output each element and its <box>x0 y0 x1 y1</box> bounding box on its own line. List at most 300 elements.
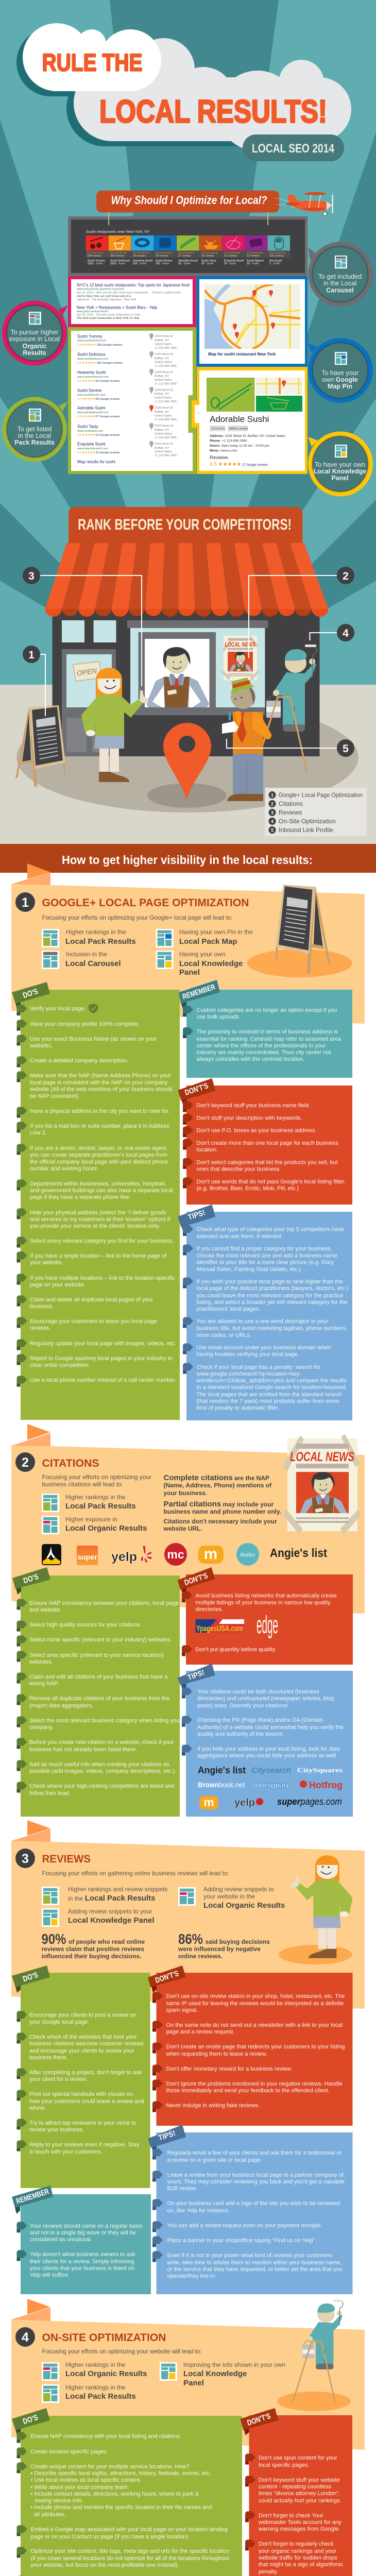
list: do's: and government buildings can also have a separate local <box>30 1188 173 1194</box>
panel: organic results: www.yelp.com/nyc/sushi <box>76 310 108 313</box>
list: don'ts: multiple listings of your business in various low quality <box>196 1600 331 1606</box>
list: don'ts: warning messages from Google. <box>258 2526 340 2532</box>
list: tips: Your citations could be both structured (business <box>197 1689 319 1695</box>
list: don'ts <box>182 1591 337 1656</box>
aggregator logos: Citysearch <box>251 1766 291 1775</box>
poster in window: LOCAL NEWS <box>225 641 255 648</box>
panel: local pack results: 209 Google reviews <box>97 344 123 347</box>
legend: 5 <box>271 827 274 833</box>
benefits: Panel <box>183 2379 204 2387</box>
list: do's: your website, but focus on the most profitable one instead). <box>31 2562 179 2568</box>
panel: organic results <box>68 276 196 327</box>
background: sky rays <box>0 0 376 690</box>
legend: 4 <box>271 819 274 824</box>
panel: don'ts section 2 <box>177 1567 353 1665</box>
list: do's: where. <box>29 2105 46 2111</box>
list: do's: towing service info. <box>35 2498 83 2504</box>
panel: local pack results: United States <box>155 379 172 382</box>
stat: 86 percent: were influenced by negative <box>178 1945 261 1953</box>
list: do's: Make sure that the NAP (Name Address Phone) on your <box>30 1073 171 1079</box>
tag: do's <box>12 1567 50 1595</box>
list: do's: (major) data aggregators. <box>29 1703 93 1709</box>
tag: don'ts: DON'T'S <box>184 1081 210 1097</box>
panel: local pack map: Map for sushi restaurant New York <box>208 352 276 357</box>
list: do's: After completing a project, don't forget to ask <box>29 2070 142 2076</box>
legend: 3 <box>271 810 274 815</box>
directory logos: super <box>77 1553 97 1561</box>
tag: don'ts <box>178 1078 215 1106</box>
list: do's: If you are a doctor, dentist, lawyer, or real estate agent <box>30 1145 166 1151</box>
section 3: reviews <box>11 1820 365 2009</box>
citation definitions: Citations don't necessary include your <box>164 1518 277 1525</box>
tag: do's: DO'S <box>22 987 39 1000</box>
section number 3 <box>15 1849 35 1868</box>
list: do's: Create a detailed company description. <box>30 1058 128 1064</box>
subtitle pill <box>243 134 344 161</box>
list: tips <box>182 1688 344 1759</box>
list: don'ts: ones that describe your business. <box>197 1166 281 1173</box>
shop sign: rank before your competitors <box>69 507 303 546</box>
list: tips: quality and authority of the source. <box>197 1731 284 1737</box>
list: tips: B2B review. <box>167 2185 197 2192</box>
tag: remember <box>179 980 220 1009</box>
list: do's: Reply to your reviews even if negative. Stay <box>29 2142 140 2148</box>
list: tips: Leave a review from your business local page to a partner company of <box>167 2172 344 2178</box>
panel: tips section 3 <box>148 2125 352 2294</box>
panel: local pack results: Buffalo, NY <box>155 339 169 342</box>
list: do's: Report to Google spammy local pages in your industry to <box>30 1355 173 1362</box>
list: tips: to a standard localized Google search for location+keyword. <box>197 1384 347 1391</box>
callout: local pack <box>2 397 68 462</box>
benefits: Inclusion in the <box>66 951 107 958</box>
benefits: Local Pack Map <box>179 937 237 946</box>
list: don'ts: Don't use on-site review station in your shop, hotel, restaurant, etc. The <box>166 1993 345 1999</box>
list: tips: operate/they live in. <box>167 2273 216 2279</box>
list: don'ts <box>245 2453 344 2575</box>
panel: local pack results: 19 Google reviews <box>96 434 120 437</box>
callout: local organic: exposure in Local <box>9 335 60 343</box>
legend: 2 <box>271 802 274 807</box>
list: tips: choose the most relevant one and add a business name <box>197 1252 337 1259</box>
list: remember: industry are mainly concentrated. Thus city center not <box>197 1049 331 1056</box>
benefits: Local Knowledge Panel <box>68 1916 155 1925</box>
panel: local pack results: 5.0 ★★★★★ <box>77 343 96 347</box>
list: don'ts: spam signal. <box>166 2007 198 2013</box>
list: remember: Yelp doesn't allow business owners to ask <box>30 2251 135 2258</box>
list: do's: Have your company profile 100% complete. <box>30 1021 140 1027</box>
panel: local pack results: 1234 Street St <box>155 335 173 338</box>
tag: do's <box>12 982 50 1009</box>
list: tips <box>152 2148 345 2279</box>
panel: organic results: The best sushi restaurants in New York on Yelp <box>77 317 139 320</box>
benefits: Higher rankings in the <box>65 2384 126 2391</box>
aggregator logos: Hotfrog <box>309 1780 343 1790</box>
poster in window <box>221 635 259 681</box>
list: do's: Check which of the websites that host your <box>29 2034 137 2040</box>
panel: local pack results: United States <box>155 414 172 417</box>
stat: 90 percent: reviews claim that positive reviews <box>41 1945 144 1953</box>
benefits: Local Knowledge <box>179 959 243 968</box>
number markers with leader lines: 1 <box>28 649 35 661</box>
list: don'ts: Don't forget to check Your <box>259 2513 323 2519</box>
panel: local carousel: 139 reviews <box>269 255 284 258</box>
callout: knowledge panel <box>308 432 373 497</box>
number markers with leader lines <box>23 567 354 757</box>
section 4: on-site optimization <box>11 2299 365 2450</box>
panel: local knowledge: Write a review <box>229 428 248 431</box>
list: don'ts: that might be a sign of algorithmic <box>259 2562 344 2568</box>
callout: local organic <box>2 301 68 366</box>
list: do's: Try to attract top reviewers in your niche to <box>29 2120 136 2126</box>
list: tips: directories) and unstructured (newspaper articles, blog <box>197 1696 334 1702</box>
callout: map pin <box>308 338 373 403</box>
list: remember: your clients that your business is listed on <box>30 2265 134 2272</box>
list: do's: Select the most relevant business category when listing your <box>29 1718 181 1724</box>
list: do's: you provide your service at the clients' location only. <box>30 1223 160 1229</box>
panel: local pack results: 4.0 ★★★★★ <box>77 451 96 454</box>
stat: 90 percent: influenced their buying decisions. <box>41 1953 142 1960</box>
aggregator logos: yelp <box>234 1797 255 1808</box>
panel: local pack results: 1234 Street St <box>155 406 173 410</box>
panel: local knowledge: Address: 1234 Street St, Buffalo, NY, United States <box>210 434 285 438</box>
list: do's: company. <box>29 1724 54 1731</box>
list: remember: and not in a single big wave or they will be <box>30 2230 136 2236</box>
list: tips: a review on a given site or local page. <box>167 2157 262 2163</box>
panel: remember section 1 <box>179 980 352 1078</box>
list: do's: your client for a review. <box>29 2076 88 2082</box>
panel: do's section 3 <box>12 1965 150 2188</box>
list: don'ts: when requesting them to leave a review. <box>166 2051 267 2057</box>
panel: local carousel: $$ - Sushi <box>224 262 236 265</box>
list: do's: the official company local page with your distinct phone <box>30 1159 168 1165</box>
panel: local knowledge: 4.5 ★★★★★ <box>210 462 242 467</box>
aggregator logos: CitySquares <box>297 1766 343 1774</box>
citation definitions: website URL. <box>163 1525 202 1532</box>
list: don'ts: Don't offer monetary reward for a business review. <box>166 2066 292 2072</box>
benefits: Local Pack Results <box>65 2392 136 2401</box>
callout: map pin: own Google <box>322 376 358 383</box>
list: don'ts: On the same note do not send out a newsletter with a link to your local <box>166 2022 343 2028</box>
list: do's <box>16 1599 181 1797</box>
list: tips: If you cannot find a proper category for your business, <box>197 1246 332 1252</box>
list: don'ts: could actually hurt your rankings. <box>259 2498 341 2504</box>
subtitle pill: LOCAL SEO 2014 <box>252 142 335 156</box>
panel: local carousel: $ - Sushi <box>269 262 280 265</box>
list: do's: page on your website. <box>30 1282 86 1288</box>
citation definitions: business name and phone number only. <box>164 1508 281 1515</box>
tag: remember: REMEMBER <box>181 982 216 1002</box>
list: remember: their clients for a review. Simply informing <box>30 2259 134 2265</box>
list: tips: practitioners' local pages. <box>197 1306 260 1312</box>
list: don'ts: content - repeating countless <box>259 2484 332 2490</box>
panel: local carousel: $$$ - Sushi <box>156 262 169 265</box>
directory logos: yelp <box>111 1550 137 1564</box>
panel: local carousel: Sushi Devine <box>156 260 173 263</box>
list: tips: on, like Yelp for instance. <box>167 2208 230 2214</box>
tag: don'ts <box>177 1567 215 1595</box>
list: do's: and encourage your clients to review your <box>29 2048 134 2054</box>
tag: tips: TIPS! <box>157 2129 177 2143</box>
panel: local knowledge: Hours: Open today 11:30 am - 10:00 pm <box>210 444 269 448</box>
list: tips <box>183 1225 348 1411</box>
citation definitions: Partial citations may include your <box>164 1500 274 1509</box>
legend: 1 <box>271 792 274 798</box>
benefits: Local Pack Results <box>65 1502 136 1511</box>
list: do's: Select niche specific (relevant to your industry) websites. <box>29 1637 172 1643</box>
list: remember: always coincides with the centroid location. <box>197 1056 304 1062</box>
citation definitions: Complete citations are the NAP <box>164 1473 269 1482</box>
panel: local knowledge: Directions <box>212 428 225 431</box>
panel: local pack results: Adorable Sushi <box>77 406 105 410</box>
illustration: girl <box>279 1855 353 1964</box>
list: tips: The local pages that are omitted from the standard search <box>197 1392 342 1398</box>
list: do's: (if you cover several locations do not optimize for all of the locations throughout <box>31 2555 229 2562</box>
list: don'ts <box>183 1101 346 1192</box>
panel: tips section 2 <box>177 1664 353 1817</box>
panel: local pack results: +1 123-456-7890 <box>155 382 177 385</box>
ground <box>0 685 376 844</box>
list: tips: Checking the PR (Page Rank) and/or DA (Domain <box>197 1717 323 1723</box>
list: do's: Regularly update your local page with images; videos, etc. <box>30 1341 176 1347</box>
list: remember: Yelp will suffice. <box>30 2272 70 2278</box>
list: do's: Select every relevant category you find for your business. <box>30 1238 174 1244</box>
panel: local pack results: www.sushidelicious.com <box>77 358 109 361</box>
band heading: how to get higher visibility <box>0 844 376 873</box>
section number 2: 2 <box>22 1455 29 1470</box>
intro text: Focusing your efforts on gathering online business reviews will lead to: <box>42 1870 229 1877</box>
character: reporter <box>222 677 271 801</box>
aggregator logos <box>198 1765 343 1809</box>
list: do's: If you list a mail box or suite number, place it in Address <box>30 1123 169 1129</box>
list: do's: and website. <box>29 1607 61 1613</box>
section heading: ON-SITE OPTIMIZATION <box>42 2332 166 2344</box>
panel: local carousel: 15 reviews <box>224 255 237 258</box>
list: don'ts: local specific pages. <box>259 2462 309 2468</box>
panel: local pack results: www.sushitasty.com <box>77 430 103 433</box>
chalkboard sign <box>15 705 65 787</box>
tag: don'ts: DON'T'S <box>246 2412 272 2428</box>
list: don'ts: penalty. <box>259 2569 278 2575</box>
list: remember: Your reviews should come on a regular basis <box>30 2223 143 2229</box>
panel: local pack results: +1 123-456-7890 <box>155 365 177 368</box>
list: do's: page if they have a separate phone line. <box>30 1194 131 1200</box>
tag: don'ts <box>148 1965 186 1993</box>
list: remember: The proximity to centroid in terms of business address is <box>197 1029 338 1035</box>
list: tips: kind of penalty or automatic filter. <box>197 1405 279 1411</box>
tag: tips <box>177 1664 215 1691</box>
benefits <box>42 1886 285 1927</box>
list: do's: Create location specific pages. <box>31 2449 108 2455</box>
tag: do's: DO'S <box>22 1971 39 1984</box>
panel: local carousel: Sea Sushi <box>269 260 282 263</box>
list: do's: follow their lead. <box>29 1790 70 1797</box>
panel: local pack results: Buffalo, NY <box>155 393 169 396</box>
panel: tips section 1 <box>178 1205 352 1420</box>
list: do's: local page is consistent with the NAP on your company <box>30 1079 168 1086</box>
benefits: Local Knowledge <box>183 2369 247 2378</box>
callout: local organic: Organic <box>22 343 47 350</box>
panel: local carousel: 4.0 ★★★★★ <box>224 251 241 255</box>
icon: biplane <box>276 192 333 216</box>
panel: local carousel: $$ - Sushi <box>178 262 190 265</box>
panel: local knowledge: Reviews <box>210 455 228 461</box>
list: do's: Encourage your clients to post a review on <box>29 2012 136 2019</box>
panel: local carousel: 209 reviews <box>87 255 101 258</box>
band heading: how to get higher visibility: How to get higher visibility in the local results: <box>62 853 313 867</box>
list: do's: Optimize your site content, title tags, meta tags and urls for the specific location <box>31 2548 229 2554</box>
logo: YpagesUSA <box>196 1619 244 1633</box>
benefits: Higher rankings in the <box>65 1494 126 1501</box>
list: don'ts: Don't create more than one local page for each business <box>197 1140 338 1146</box>
benefits: in the Local Pack Results <box>68 1894 155 1903</box>
benefits: Higher rankings and review snippets <box>68 1886 167 1893</box>
list: don'ts: Don't select categories that list the products you sell, but <box>197 1159 338 1165</box>
panel: local pack results: 1234 Street St <box>155 443 173 446</box>
list: do's: be NAP consistent). <box>30 1093 80 1099</box>
tag: don'ts <box>240 2408 278 2435</box>
benefits: Having your own <box>179 951 225 958</box>
panel: local pack results: 1234 Street St <box>155 388 173 392</box>
stat: 86 percent <box>178 1931 270 1960</box>
panel: organic results: Japanese - The amazing Japanese - New York <box>77 298 136 301</box>
panel: local carousel: $$$$ - Sushi <box>88 262 102 265</box>
list: do's: how your customers could leave a review and <box>29 2098 144 2105</box>
panel: local knowledge: Phone: +1 123-456-7890 <box>210 439 247 443</box>
callout: knowledge panel: Local Knowledge <box>314 468 366 475</box>
tag: tips <box>148 2125 186 2152</box>
benefits: Adding review snippets to your <box>68 1908 152 1915</box>
panel: local knowledge: » <box>197 411 199 415</box>
directory logos: mc <box>167 1548 184 1561</box>
list: do's: • Include contact details, directions, working hours, where to park & <box>31 2491 199 2497</box>
section number 1 <box>15 892 35 912</box>
callout: local carousel: Carousel <box>326 286 354 294</box>
benefits: Improving the info shown in your own <box>183 2361 285 2368</box>
benefits: Adding review snippets to <box>203 1886 274 1893</box>
benefits: Local Carousel <box>65 959 121 968</box>
list: do's: business there. <box>29 2055 68 2061</box>
benefits <box>42 1494 147 1534</box>
citation definitions: (Name, Address, Phone) mentions of <box>164 1482 272 1489</box>
list: do's: page or on your Contact us page (if you have a single location). <box>31 2534 190 2540</box>
panel: local pack results: 26 Google reviews <box>96 380 120 383</box>
panel: local carousel: 5.0 ★★★★★ <box>110 251 127 255</box>
list: do's: Use a local phone number instead of a call center number. <box>30 1377 176 1383</box>
list: do's: Line 2. <box>30 1130 47 1136</box>
panel: local pack results: 1234 Street St <box>155 371 173 374</box>
section 2: citations <box>11 1424 365 1614</box>
list: do's <box>16 2011 144 2155</box>
panel: do's section 4 <box>12 2408 242 2576</box>
list: do's: and services to my customers at their location" option) if <box>30 1216 170 1223</box>
panel: local carousel: Heavenly Sushi <box>133 260 153 263</box>
panel: local pack results: Sushi Devine <box>77 388 102 393</box>
panel: do's section 1 <box>12 982 180 1420</box>
tag: tips: TIPS! <box>186 1668 206 1682</box>
section number 4 <box>15 2327 35 2347</box>
legend <box>265 788 367 836</box>
stat: 86 percent: 86% <box>178 1931 203 1947</box>
list: tips: (that renders the 7 pack) most probably suffer from some <box>197 1398 339 1404</box>
benefits: Higher rankings in the <box>65 2361 126 2368</box>
panel: local knowledge: Menu: menus.com <box>210 449 237 452</box>
panel: local pack results: Map results for sushi <box>77 460 115 464</box>
shop building <box>53 609 319 756</box>
list: don'ts <box>152 1992 345 2112</box>
panel: local pack results: www.sushiyummy.com <box>77 339 106 342</box>
panel: local pack results: Buffalo, NY <box>155 429 169 432</box>
panel: local pack results: 359 Google reviews <box>97 362 123 365</box>
panel: organic results: Apr 20, 2014 - Here are the city's best sushi restaurants ... If there's a pitted sushi <box>77 292 181 295</box>
list: don'ts: Don't use words that do not pass Google's local listing filter. <box>197 1179 346 1185</box>
section heading: GOOGLE+ LOCAL PAGE OPTIMIZATION <box>42 897 249 909</box>
panel: local pack results: 4.6 ★★★★★ <box>77 379 96 383</box>
panel: local carousel: $$ - Sushi <box>201 262 213 265</box>
panel: local pack results: 5.0 ★★★★★ <box>77 361 96 365</box>
list: do's: website). <box>29 1043 53 1049</box>
list: tips: posts) ones. Diversify your citations! <box>197 1703 288 1709</box>
callout: map pin: Map Pin <box>328 383 352 390</box>
intro text: Focusing your efforts on optimizing your website will lead to: <box>42 2348 202 2355</box>
title: Rule the: RULE THE <box>42 48 142 76</box>
aggregator logos: m <box>203 1795 214 1809</box>
benefits: Panel <box>179 968 200 977</box>
list: do's: If you have multiple locations – link to the location-specific <box>30 1275 175 1281</box>
directory logos: Angie's list <box>270 1546 327 1560</box>
callout: knowledge panel: Panel <box>331 474 349 482</box>
panel: local knowledge: 27 Google reviews <box>242 464 268 467</box>
list: tips: Even if it is not in your power what kind of reviews your customers <box>167 2252 333 2259</box>
list: don'ts: Never indulge in writing fake reviews. <box>166 2103 260 2109</box>
list: do's: Use your exact Business Name (as shown on your <box>30 1036 157 1042</box>
list: do's: business has not already been listed there. <box>29 1747 137 1753</box>
list: tips: You are allowed to use a one word descriptor in your <box>197 1318 329 1325</box>
panel: organic results: chef in New York, we can't know who it is. <box>77 295 132 298</box>
panel: organic results: New York > Restaurants > Sushi Bars - Yelp <box>77 305 158 310</box>
list: do's: If you have a single location – link to the home page of <box>30 1253 167 1259</box>
tag: don'ts: DON'T'S <box>154 1969 180 1985</box>
shop sign: rank before your competitors: RANK BEFORE YOUR COMPETITORS! <box>78 516 292 533</box>
panel: local pack results: United States <box>155 397 172 400</box>
list: remember: considered as unnatural. <box>30 2236 92 2243</box>
callout: local organic: To pursue higher <box>10 329 59 336</box>
panel: local pack results: www.exquisitesush.com <box>77 447 108 450</box>
benefits: Having your own Pin in the <box>179 928 253 936</box>
list: tips: local page of the distinct practitioners (lawyers, doctors, etc.) <box>197 1285 348 1292</box>
list: tips: or the service that they have requested, or better yet the area that you <box>167 2266 343 2273</box>
panel: organic results: NYC's 12 best sushi restaurants: Top spots for Japanese food <box>77 283 190 287</box>
list: don'ts: Don't forget to regularly check <box>259 2541 334 2547</box>
tag: don'ts: DON'T'S <box>183 1571 209 1587</box>
tag: tips: TIPS! <box>187 1208 206 1222</box>
panel: local pack results: Exquisite Sushi <box>77 442 106 446</box>
section 1: Google+ local page optimization <box>11 863 365 1024</box>
benefits <box>42 928 253 977</box>
list: tips: Place a banner in your shop/office saying "Find us on Yelp". <box>167 2238 317 2244</box>
list: do's: Encourage your customers to leave you local page <box>30 1318 157 1325</box>
panel: local carousel: 5.0 ★★★★★ <box>87 251 104 255</box>
panel: local carousel: 4.0 ★★★★★ <box>201 251 218 255</box>
list: tips: Authority) of a website could somewhat help you verify the <box>197 1724 344 1731</box>
list: don'ts: Don't ignore the problems mentioned in your negative reviews. Handle <box>166 2081 343 2087</box>
list: tips: listing, and select a broader yet still relevant category for the <box>197 1299 347 1306</box>
tag: do's <box>12 1965 50 1993</box>
stat: 86 percent: said buying decisions <box>205 1938 270 1945</box>
panel: local pack results: www.adorablesushi.com <box>77 411 109 414</box>
panel: local pack results: Buffalo, NY <box>155 447 169 450</box>
list: do's: Select area specific (relevant to your service location) <box>29 1652 163 1658</box>
list: tips: identifier to your title for a more clear picture (e.g. Gary <box>197 1260 334 1266</box>
